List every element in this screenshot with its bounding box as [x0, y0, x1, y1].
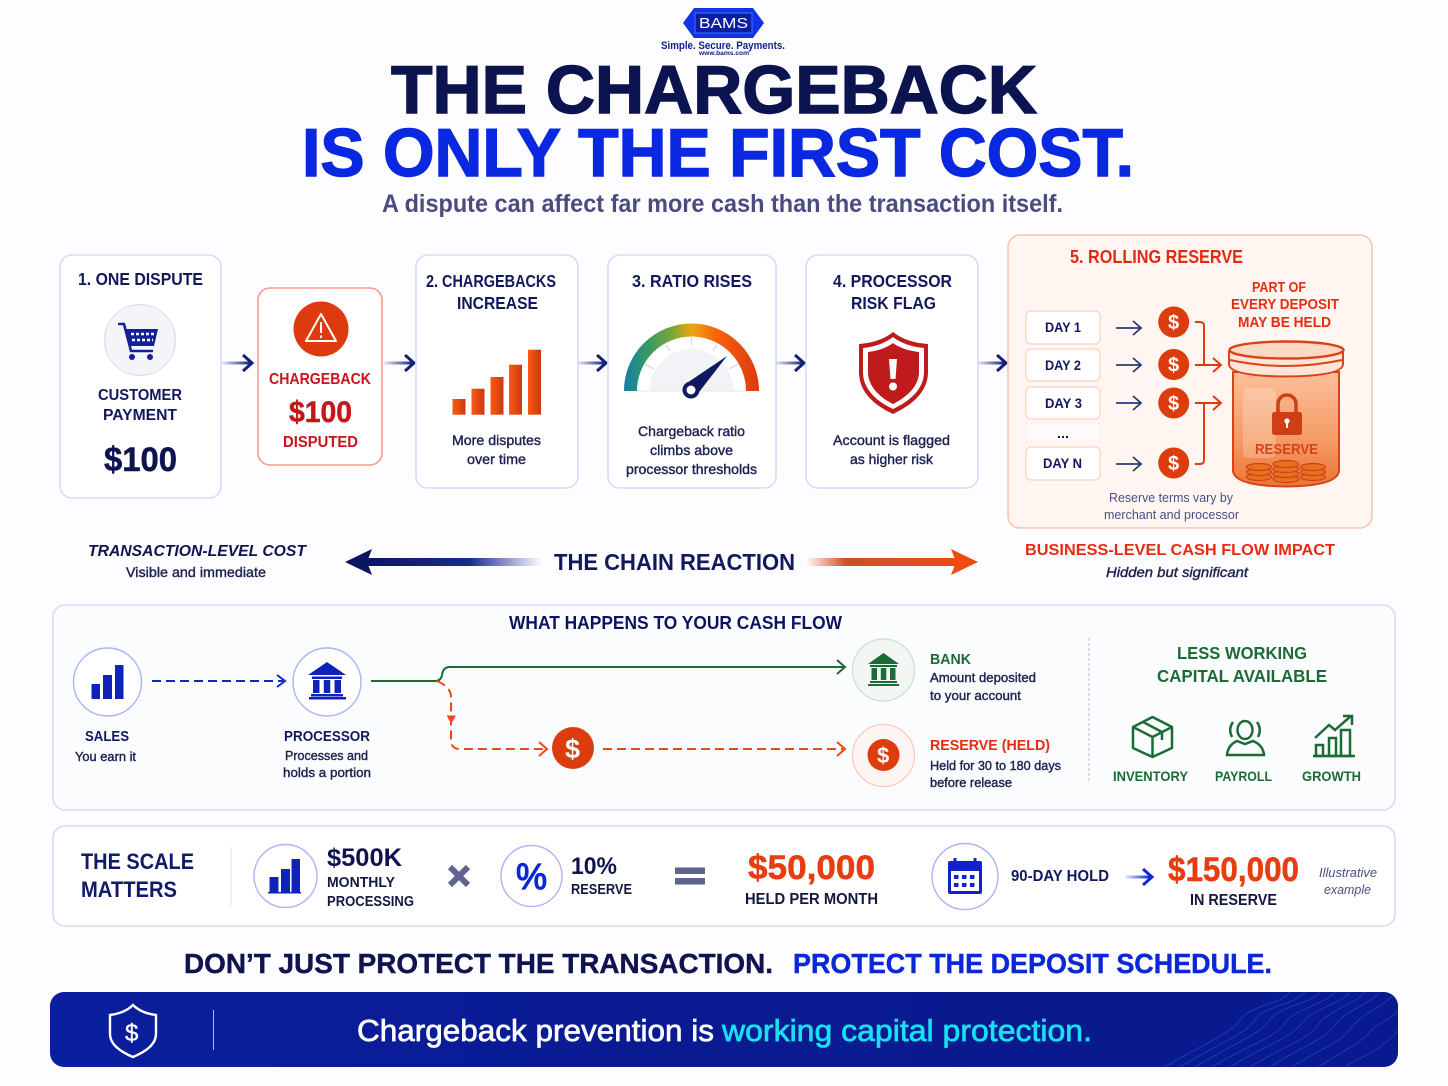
text: transaction-level cost: [88, 543, 307, 580]
callout: part of every deposit: PART OF: [1252, 280, 1306, 296]
stat: reserve: 10%: [571, 853, 617, 880]
day boxes: DAY N: [1043, 455, 1082, 471]
coins: $: [1168, 453, 1179, 475]
icon: shopping cart: [104, 304, 176, 376]
banner text: Chargeback prevention is: [357, 1013, 714, 1048]
icon: lock: [1272, 395, 1302, 435]
bank node: to your account: [930, 688, 1021, 703]
panel: chargeback: [258, 288, 382, 465]
sales node: [74, 648, 142, 764]
icon: coin: [552, 727, 594, 769]
coins: [1158, 306, 1189, 478]
panel: chargeback: $100: [289, 396, 352, 429]
panel: 1. one dispute: [60, 255, 221, 498]
title: IS ONLY THE FIRST COST.: [302, 115, 1134, 191]
icon: growth: [1302, 716, 1361, 784]
icon: shield warning: [859, 332, 928, 414]
stat: monthly processing: MONTHLY: [327, 875, 395, 891]
arrow: hold to reserve: [1125, 869, 1152, 885]
icon: reserve jar: RESERVE: [1255, 441, 1318, 458]
reserve node: $: [877, 743, 889, 768]
coins: $: [1168, 312, 1179, 334]
callout: part of every deposit: EVERY DEPOSIT: [1231, 297, 1339, 313]
panel: 2. chargebacks increase: [416, 255, 578, 488]
tagline: PROTECT THE DEPOSIT SCHEDULE.: [793, 948, 1272, 979]
panel: 3. ratio rises: Chargeback ratio: [638, 423, 745, 439]
icon: calendar: [932, 844, 998, 910]
bar chart: [452, 350, 541, 415]
icon: payroll: [1215, 721, 1272, 784]
heading: the scale matters: [81, 849, 194, 902]
text: 90-day hold: 90-DAY HOLD: [1011, 868, 1109, 885]
stat: monthly processing: $500K: [327, 844, 402, 872]
note: illustrative example: Illustrative: [1319, 866, 1377, 880]
text: transaction-level cost: Visible and immediate: [126, 564, 266, 580]
callout: part of every deposit: MAY BE HELD: [1238, 315, 1331, 331]
heading: the scale matters: MATTERS: [81, 877, 177, 902]
reserve note: merchant and processor: [1104, 508, 1239, 522]
panel: 2. chargebacks increase: 2. CHARGEBACKS: [426, 271, 556, 291]
gauge: [630, 330, 752, 396]
panel: 3. ratio rises: 3. RATIO RISES: [632, 271, 752, 291]
reserve node: RESERVE (HELD): [930, 737, 1050, 754]
panel: chargeback: CHARGEBACK: [269, 371, 371, 388]
day boxes: DAY 3: [1045, 395, 1082, 411]
note: illustrative example: example: [1324, 883, 1371, 897]
icon: growth: GROWTH: [1302, 768, 1361, 784]
icon: payroll: PAYROLL: [1215, 768, 1272, 784]
icon: dollar shield: [110, 1005, 156, 1057]
panel: chargeback: DISPUTED: [283, 434, 358, 451]
title: THE CHARGEBACK: [391, 52, 1037, 128]
icon: percent: %: [516, 856, 547, 897]
banner text: working capital protection.: [721, 1013, 1092, 1048]
processor node: Processes and: [285, 748, 368, 763]
icon: dollar shield: $: [125, 1020, 138, 1047]
arrow: step 4 to step 5: [978, 355, 1006, 371]
panel: 4. processor risk flag: as higher risk: [850, 451, 934, 467]
icon: reserve jar: [1229, 342, 1344, 486]
text: business-level impact: BUSINESS-LEVEL CASH FLOW IMPACT: [1025, 542, 1335, 559]
coins: $: [1168, 354, 1179, 376]
panel: 5. rolling reserve: [1008, 235, 1372, 528]
panel: 2. chargebacks increase: More disputes: [452, 432, 541, 448]
stat: in reserve: IN RESERVE: [1190, 892, 1277, 909]
heading: the chain reaction: THE CHAIN REACTION: [554, 549, 795, 575]
arrow: step 3 to step 4: [776, 355, 804, 371]
tagline: [184, 948, 1272, 979]
icon: inventory: [1113, 717, 1189, 784]
panel: the scale matters: [53, 826, 1395, 926]
connectors to jar: [1195, 322, 1221, 464]
logo: BAMS: [661, 8, 785, 57]
sales node: SALES: [85, 729, 129, 745]
note: illustrative example: [1319, 866, 1377, 897]
icon: warning: [294, 302, 348, 356]
heading: less working capital: LESS WORKING: [1177, 643, 1307, 663]
stat: held per month: [745, 849, 878, 908]
processor node: PROCESSOR: [284, 729, 370, 745]
heading: less working capital: [1157, 643, 1327, 686]
stat: held per month: $50,000: [748, 849, 875, 887]
tagline: DON’T JUST PROTECT THE TRANSACTION.: [184, 948, 773, 979]
panel: 2. chargebacks increase: over time: [467, 451, 526, 467]
logo: BAMS: BAMS: [699, 15, 748, 32]
logo: BAMS: Simple. Secure. Payments.: [661, 40, 785, 52]
panel: 1. one dispute: $100: [104, 441, 177, 479]
reserve node: Held for 30 to 180 days: [930, 758, 1061, 773]
arrow: chargeback to step 2: [384, 355, 414, 371]
callout: part of every deposit: [1231, 280, 1339, 331]
panel: 5. rolling reserve: 5. ROLLING RESERVE: [1070, 247, 1243, 267]
stat: in reserve: $150,000: [1168, 851, 1299, 889]
heading: the scale matters: THE SCALE: [81, 849, 194, 874]
panel: 4. processor risk flag: Account is flagged: [833, 432, 950, 448]
panel: 4. processor risk flag: [806, 255, 978, 488]
bank node: [852, 639, 1036, 703]
icon: inventory: INVENTORY: [1113, 768, 1189, 784]
icon: coin: $: [565, 734, 580, 764]
text: business-level impact: [1025, 542, 1335, 580]
processor node: holds a portion: [283, 765, 371, 780]
sales node: You earn it: [75, 749, 136, 764]
panel: what happens to your cash flow: [53, 605, 1395, 810]
operator: times: [450, 867, 468, 885]
processor node: [283, 648, 371, 780]
panel: 1. one dispute: PAYMENT: [103, 407, 177, 424]
flow: to reserve: [437, 681, 845, 756]
panel: 4. processor risk flag: 4. PROCESSOR: [833, 271, 952, 291]
day boxes: ...: [1057, 425, 1069, 441]
arrow: chain reaction right: [806, 549, 978, 575]
heading: cash flow: WHAT HAPPENS TO YOUR CASH FLOW: [509, 613, 842, 633]
text: transaction-level cost: TRANSACTION-LEVEL COST: [88, 543, 307, 560]
bank node: Amount deposited: [930, 670, 1036, 685]
coins: $: [1168, 393, 1179, 415]
stat: monthly processing: PROCESSING: [327, 894, 414, 910]
subtitle: A dispute can affect far more cash than the transaction itself.: [382, 190, 1063, 218]
operator: equals: [675, 868, 705, 884]
day boxes: DAY 1: [1045, 319, 1081, 335]
reserve note: [1104, 491, 1239, 522]
panel: 4. processor risk flag: RISK FLAG: [851, 293, 936, 313]
stat: held per month: HELD PER MONTH: [745, 891, 878, 908]
bank node: BANK: [930, 652, 972, 668]
banner: [50, 992, 1398, 1067]
arrow: chain reaction left: [345, 549, 542, 575]
day arrows: [1116, 321, 1141, 471]
stat: monthly processing: [327, 844, 414, 910]
panel: 3. ratio rises: climbs above: [650, 442, 733, 458]
stat: reserve: [571, 853, 632, 898]
arrow: step 1 to chargeback: [222, 355, 252, 371]
icon: percent: [501, 846, 562, 906]
reserve note: Reserve terms vary by: [1109, 491, 1234, 505]
panel: 1. one dispute: 1. ONE DISPUTE: [78, 269, 203, 289]
banner text: [357, 1013, 1092, 1048]
coin stacks: [1246, 460, 1326, 482]
flow: to bank: [371, 660, 845, 681]
day boxes: DAY 2: [1045, 357, 1081, 373]
icon: monthly processing bars: [254, 844, 317, 908]
logo: BAMS: www.bams.com: [698, 51, 749, 57]
stat: in reserve: [1168, 851, 1299, 909]
reserve node: [852, 724, 1061, 790]
reserve node: before release: [930, 775, 1012, 790]
arrow: step 2 to step 3: [578, 355, 606, 371]
panel: 1. one dispute: CUSTOMER: [98, 387, 182, 404]
panel: 3. ratio rises: [608, 255, 776, 488]
arrow: sales to processor: [152, 675, 285, 687]
panel: 2. chargebacks increase: INCREASE: [457, 293, 538, 313]
heading: less working capital: CAPITAL AVAILABLE: [1157, 666, 1327, 686]
panel: 3. ratio rises: processor thresholds: [626, 461, 757, 477]
title: [302, 52, 1134, 191]
text: business-level impact: Hidden but significant: [1106, 564, 1249, 580]
stat: reserve: RESERVE: [571, 882, 632, 898]
day boxes: [1026, 311, 1100, 480]
